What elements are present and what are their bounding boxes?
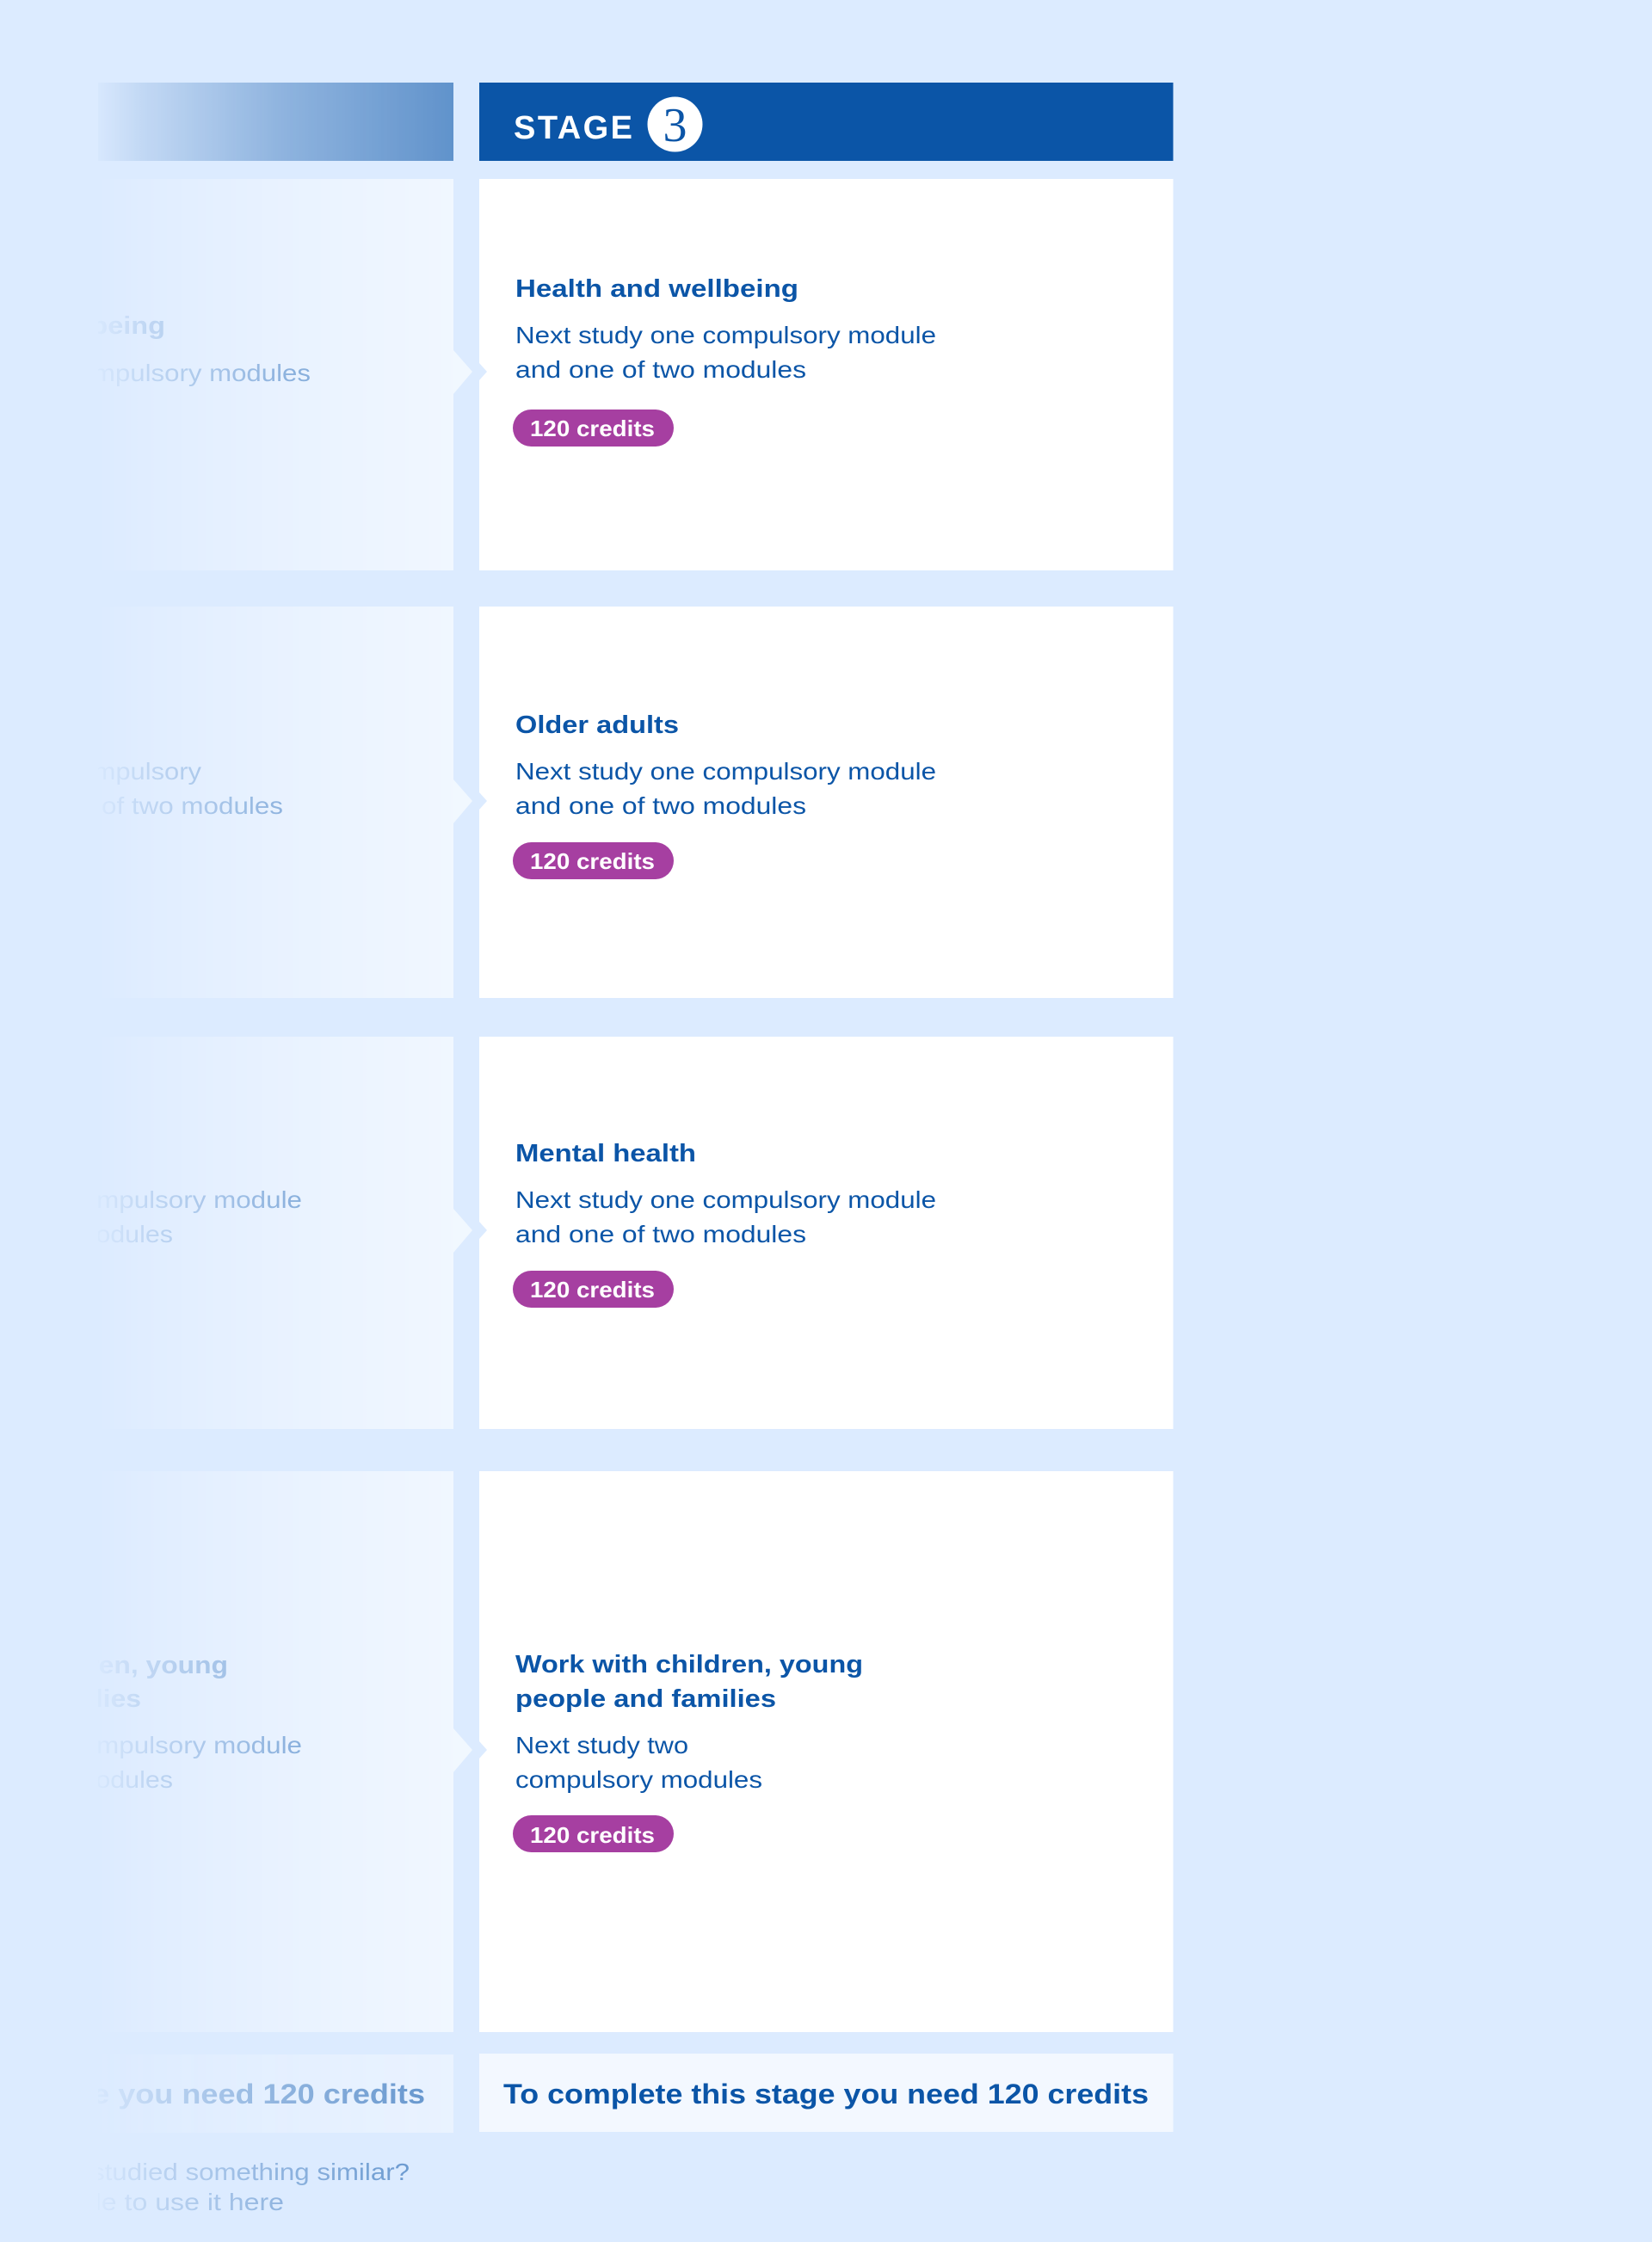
faded card: older adults [105, 607, 453, 998]
faded card: mental health: modules [74, 1221, 173, 1247]
faded note: able to use it here [65, 2189, 284, 2215]
credits pill [513, 410, 674, 447]
infographic: stage columns [105, 83, 1174, 2211]
card body: Next study one compulsory module [515, 1186, 936, 1213]
arrow: card 3 chevron [453, 1209, 472, 1253]
card: health and wellbeing [479, 179, 1174, 570]
card body: and one of two modules [515, 356, 806, 383]
credits pill [513, 1271, 674, 1308]
card body [515, 1186, 936, 1247]
faded footer [105, 2054, 453, 2133]
faded card: work with children [105, 1471, 453, 2032]
faded card: mental health [105, 1037, 453, 1429]
credits pill: 120 credits [530, 1277, 655, 1303]
arrow: card 4 chevron [453, 1728, 472, 1772]
faded card: work with children: modules [74, 1766, 173, 1793]
faded note: studied something similar? [91, 2159, 410, 2185]
footer: completion requirement [479, 2054, 1174, 2132]
card title: Mental health [515, 1140, 696, 1167]
credits pill: 120 credits [530, 416, 655, 441]
card body: and one of two modules [515, 1221, 806, 1247]
card: older adults [479, 607, 1174, 998]
arrow: card 1 chevron [453, 350, 472, 394]
panel: stage 3 column [479, 83, 1174, 2132]
panel: faded stage 2 column [105, 83, 453, 2211]
card title [515, 1651, 863, 1713]
card body: Next study two [515, 1732, 688, 1758]
faded footer: stage you need 120 credits [28, 2079, 425, 2110]
card title: Older adults [515, 711, 679, 739]
heading: stage: STAGE [514, 110, 632, 146]
card body [515, 1732, 762, 1793]
faded card: work with children: compulsory module [68, 1732, 302, 1758]
card: mental health [479, 1037, 1174, 1429]
card title: people and families [515, 1685, 776, 1713]
credits pill [513, 842, 674, 879]
icon: numbered circle 3 [647, 96, 702, 152]
faded card: health and wellbeing: wellbeing [37, 312, 165, 340]
faded stage header [105, 83, 453, 161]
faded card: older adults: compulsory [65, 758, 201, 785]
stage 3 header [479, 83, 1174, 161]
faded card: work with children: families [39, 1685, 141, 1713]
credits pill: 120 credits [530, 1822, 655, 1848]
faded note [105, 2163, 409, 2211]
faded card: health and wellbeing: compulsory modules [65, 360, 311, 386]
card body: compulsory modules [515, 1766, 762, 1793]
faded card: health and wellbeing [105, 179, 453, 570]
card body: and one of two modules [515, 792, 806, 819]
credits pill: 120 credits [530, 848, 655, 874]
card body [515, 758, 936, 819]
faded card: work with children: children, young [24, 1652, 228, 1679]
credits pill [513, 1815, 674, 1852]
card title: Work with children, young [515, 1651, 863, 1678]
card: work with children, young people and families [479, 1471, 1174, 2032]
faded card: older adults: of two modules [102, 792, 283, 819]
icon: numbered circle 3: 3 [663, 99, 687, 152]
footer: completion requirement: To complete this stage you need 120 credits [503, 2079, 1149, 2110]
card title: Health and wellbeing [515, 275, 798, 303]
card body: Next study one compulsory module [515, 758, 936, 785]
card body [515, 322, 936, 383]
card body: Next study one compulsory module [515, 322, 936, 348]
arrow: card 2 chevron [453, 779, 472, 823]
faded card: mental health: compulsory module [68, 1186, 302, 1213]
